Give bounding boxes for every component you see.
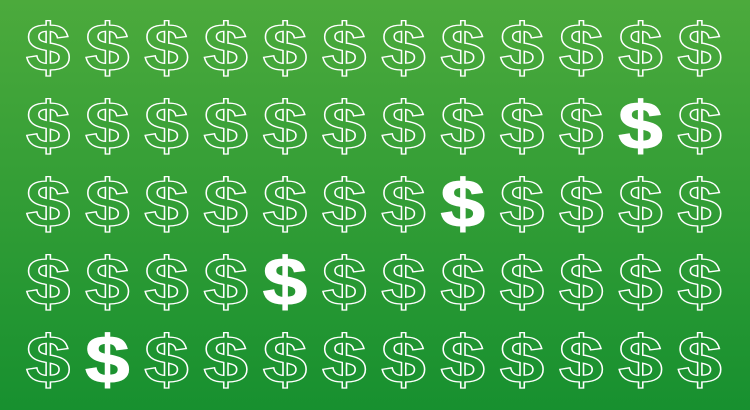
dollar sign grid: $ [618, 88, 663, 164]
dollar sign grid: $ [26, 10, 70, 86]
dollar sign grid: $ [500, 322, 544, 398]
dollar sign grid: $ [500, 166, 544, 242]
dollar sign grid: $ [322, 244, 367, 320]
dollar sign grid: $ [203, 244, 248, 320]
dollar sign grid: $ [203, 88, 248, 164]
dollar sign grid: $ [381, 10, 426, 86]
dollar sign grid: $ [381, 88, 426, 164]
dollar sign grid: $ [144, 88, 189, 164]
dollar sign grid: $ [263, 88, 307, 164]
dollar sign grid: $ [677, 88, 722, 164]
dollar sign grid: $ [618, 244, 663, 320]
dollar sign grid: $ [322, 10, 367, 86]
dollar sign grid: $ [559, 88, 603, 164]
dollar sign grid: $ [85, 244, 130, 320]
dollar sign grid: $ [500, 88, 544, 164]
dollar sign grid: $ [26, 244, 70, 320]
dollar sign grid: $ [559, 10, 603, 86]
dollar sign grid: $ [26, 166, 70, 242]
dollar sign grid: $ [85, 322, 130, 398]
dollar sign grid: $ [500, 244, 544, 320]
dollar sign grid: $ [203, 322, 248, 398]
dollar sign grid: $ [144, 10, 189, 86]
dollar sign grid: $ [144, 244, 189, 320]
dollar sign grid: $ [500, 10, 544, 86]
dollar sign grid: $ [559, 166, 603, 242]
dollar sign grid: $ [203, 166, 248, 242]
dollar sign grid: $ [618, 322, 663, 398]
dollar sign grid: $ [263, 10, 307, 86]
dollar sign grid: $ [618, 166, 663, 242]
dollar sign grid: $ [381, 322, 426, 398]
dollar sign grid: $ [618, 10, 663, 86]
dollar sign grid: $ [559, 322, 603, 398]
dollar sign grid: $ [440, 322, 485, 398]
dollar sign grid: $ [26, 88, 70, 164]
dollar sign grid: $ [322, 166, 367, 242]
dollar sign grid: $ [263, 322, 307, 398]
dollar sign grid: $ [263, 244, 307, 320]
dollar sign grid: $ [677, 10, 722, 86]
dollar sign grid: $ [559, 244, 603, 320]
dollar sign grid: $ [85, 10, 130, 86]
dollar sign grid: $ [440, 10, 485, 86]
dollar sign grid: $ [322, 322, 367, 398]
dollar sign grid: $ [144, 322, 189, 398]
dollar sign grid: $ [381, 166, 426, 242]
dollar sign grid: $ [144, 166, 189, 242]
dollar sign grid: $ [85, 88, 130, 164]
dollar sign grid: $ [677, 244, 722, 320]
dollar sign grid: $ [203, 10, 248, 86]
dollar sign grid: $ [322, 88, 367, 164]
dollar sign grid: $ [440, 244, 485, 320]
dollar sign grid: $ [85, 166, 130, 242]
dollar sign grid: $ [26, 322, 70, 398]
dollar sign grid: $ [440, 166, 485, 242]
dollar sign grid: $ [440, 88, 485, 164]
dollar sign grid: $ [677, 322, 722, 398]
dollar sign grid: $ [677, 166, 722, 242]
dollar sign grid: $ [381, 244, 426, 320]
dollar sign grid: $ [263, 166, 307, 242]
